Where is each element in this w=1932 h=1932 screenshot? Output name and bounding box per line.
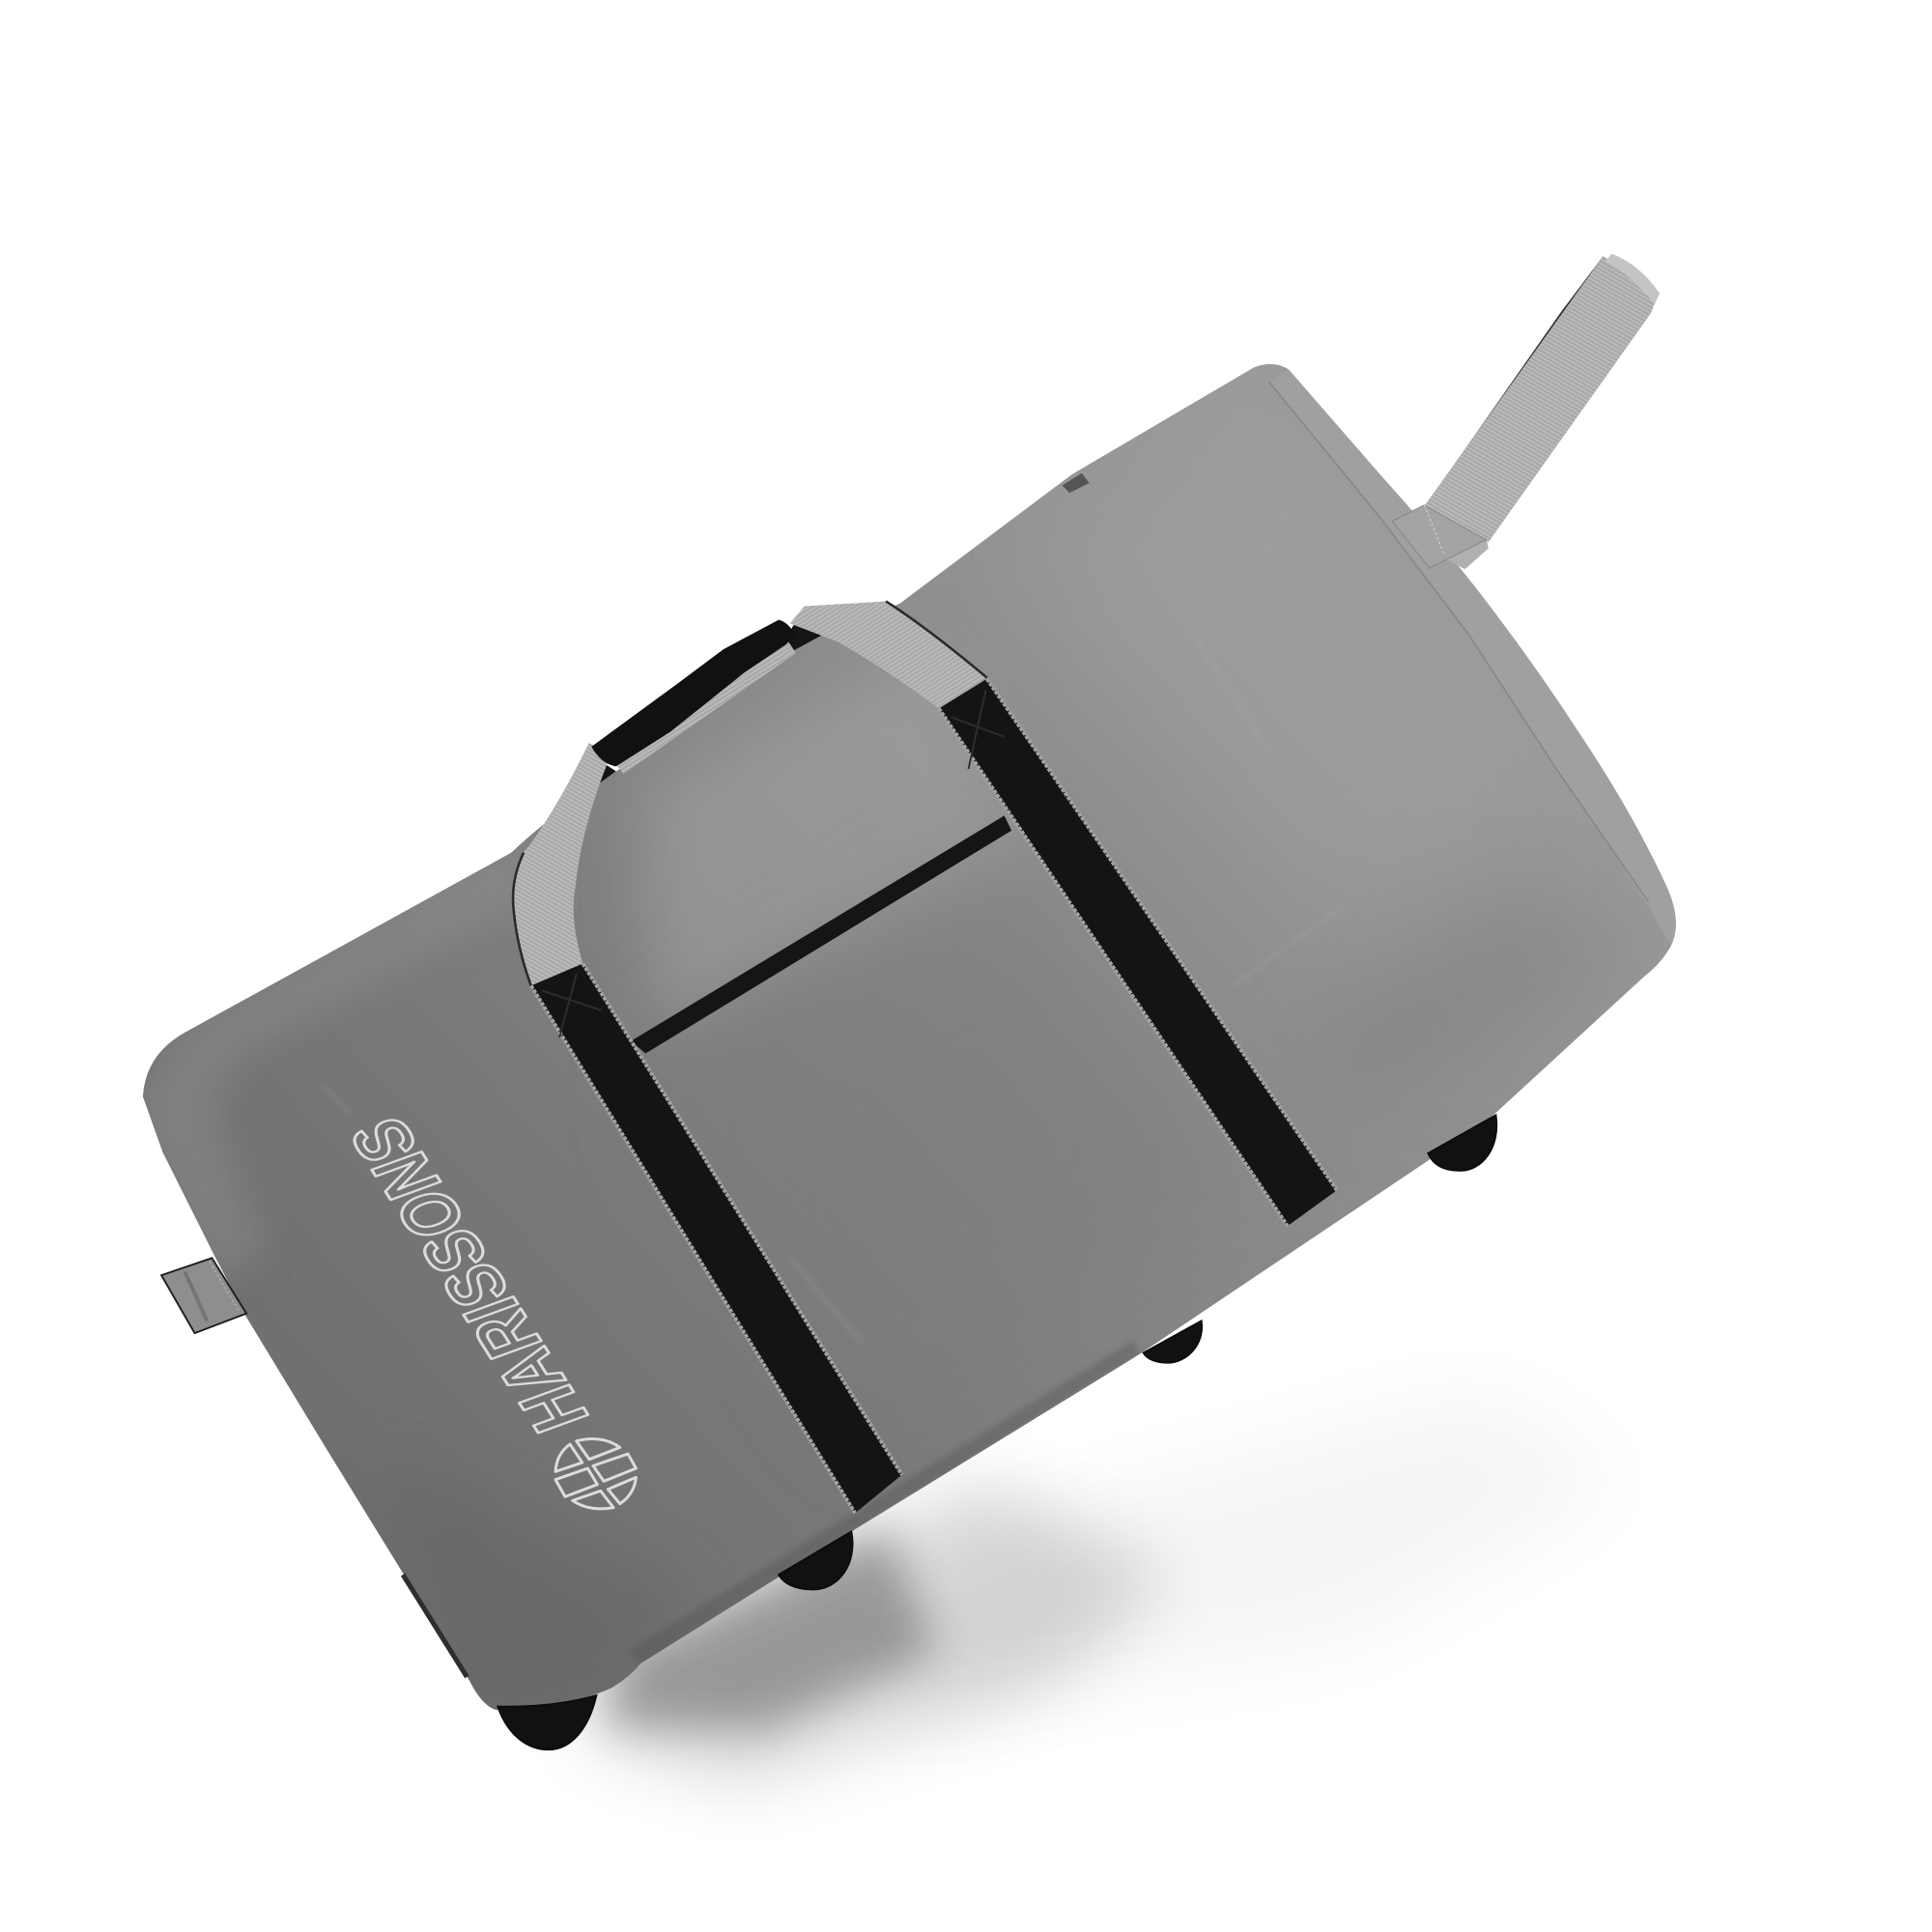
top end carry strap bbox=[1423, 254, 1660, 542]
lighter band along left corner bbox=[143, 877, 500, 1265]
wheels bbox=[497, 1115, 1496, 1749]
box stitch bbox=[952, 690, 1005, 769]
right strap grey section bbox=[790, 601, 987, 708]
left black strap bbox=[531, 963, 902, 1513]
ground shadow bbox=[579, 1392, 1627, 1786]
carry handle assembly bbox=[513, 601, 987, 985]
left strap grey section bbox=[513, 743, 611, 985]
bag body bbox=[124, 364, 1676, 1713]
brand logo emblem bbox=[555, 1438, 636, 1509]
left side edge corner bbox=[403, 1575, 467, 1677]
front pocket zip opening bbox=[631, 815, 1011, 1054]
lower edge shading bbox=[629, 1341, 1140, 1665]
inner handle webbing bbox=[613, 639, 796, 774]
right side gusset strip bbox=[1269, 370, 1676, 947]
top strap stitched base tab bbox=[1392, 505, 1489, 569]
wrinkles bbox=[323, 579, 1343, 1343]
padded black grip bbox=[591, 620, 795, 766]
fabric shading bbox=[124, 370, 1676, 1713]
right black strap bbox=[939, 679, 1337, 1226]
top edge back strap hint bbox=[1062, 473, 1090, 493]
handle shadow wedge bbox=[590, 623, 823, 790]
side tab bbox=[161, 1258, 246, 1333]
box stitch bbox=[542, 974, 601, 1037]
product image: grey wheeled duffel bag bbox=[143, 253, 1676, 1803]
left strap dark edge bbox=[513, 853, 531, 985]
brand wordmark: HARISSONS bbox=[332, 1109, 606, 1442]
